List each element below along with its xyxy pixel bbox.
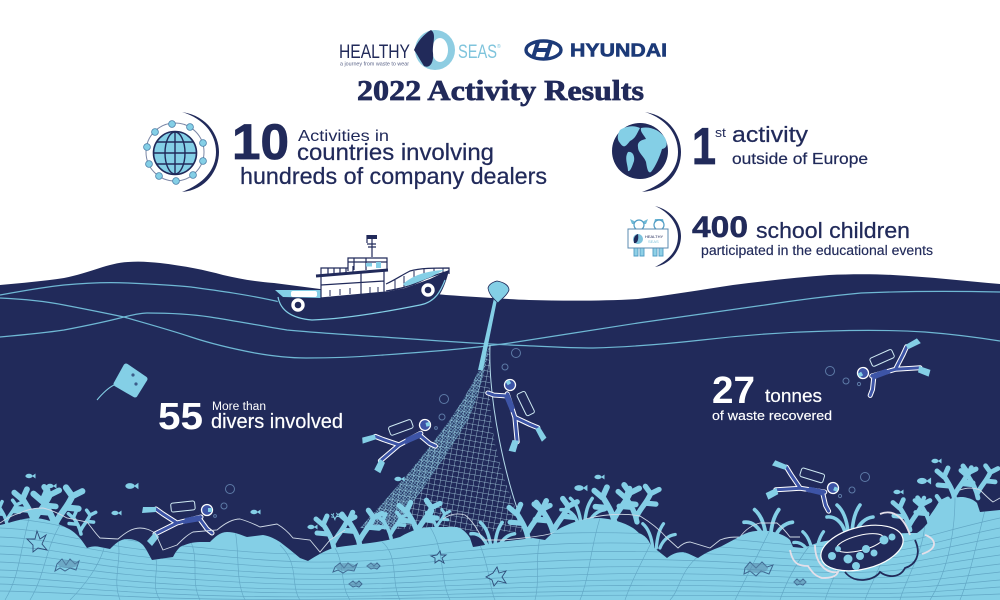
stat: first activity: st [715, 125, 726, 140]
hull [275, 270, 449, 320]
logo: Hyundai [526, 40, 667, 60]
title: 2022 Activity Results [357, 76, 644, 107]
net float [488, 281, 509, 303]
number 10: 10 [232, 114, 289, 170]
number 55: 55 [158, 396, 203, 438]
text: more than: More than [212, 401, 266, 413]
icon: earth [612, 112, 681, 192]
crabs [55, 559, 806, 587]
stat: school children [628, 206, 933, 267]
diver: holding net [477, 375, 552, 459]
fish [25, 458, 941, 530]
text: tonnes: tonnes [765, 386, 822, 406]
text: divers involved: divers involved [211, 411, 343, 433]
logo: Hyundai: HYUNDAI [570, 40, 667, 60]
starfish [27, 531, 506, 586]
net [360, 281, 525, 532]
corals and weeds [0, 466, 998, 556]
logo: Healthy Seas: HEALTHY [339, 42, 410, 63]
stat: 27 tonnes [712, 370, 832, 423]
logo: Healthy Seas: SEAS [458, 42, 497, 63]
logo: Healthy Seas: ® [497, 43, 501, 50]
diver: bottom left [142, 501, 212, 546]
ship [275, 235, 449, 320]
seabed net grid [0, 497, 1000, 600]
stat: 55 divers [158, 396, 343, 438]
diver: top right [854, 333, 937, 407]
tyre with ropes [790, 512, 934, 580]
icon: children with sign [628, 206, 681, 267]
stingray [97, 366, 145, 400]
icon: children with sign: SEAS [648, 239, 659, 244]
text: countries: countries involving [297, 139, 494, 165]
text: outside of Europe: outside of Europe [732, 151, 868, 168]
icon: children with sign: HEALTHY [645, 234, 663, 239]
current lines [0, 283, 1000, 358]
text: activity: activity [732, 122, 808, 147]
superstructure [321, 235, 449, 298]
text: activities: Activities in [298, 128, 389, 145]
stat: 10 activities [144, 112, 547, 192]
divers [142, 333, 937, 546]
number 27: 27 [712, 370, 755, 412]
number 400: 400 [692, 211, 748, 244]
hump outlines [0, 488, 1000, 552]
diver: near net left [360, 415, 439, 476]
text: of waste recovered: of waste recovered [712, 408, 832, 423]
lifebuoys [293, 300, 303, 310]
text: participated: participated in the educational events [701, 243, 933, 258]
text: dealers: hundreds of company dealers [240, 163, 547, 189]
stern deck [275, 290, 321, 298]
logo: Healthy Seas [339, 30, 501, 70]
cabin background [321, 271, 386, 298]
bubbles [214, 348, 870, 517]
seabed [0, 497, 1000, 600]
stat: first activity [612, 112, 868, 192]
text: school children: school children [756, 218, 910, 243]
logo: Healthy Seas: a journey from waste to wear [340, 62, 409, 68]
diver: bottom right [759, 454, 842, 523]
number 1st: 1 [692, 118, 716, 176]
sea [0, 262, 1000, 600]
icon: network globe [144, 112, 219, 192]
